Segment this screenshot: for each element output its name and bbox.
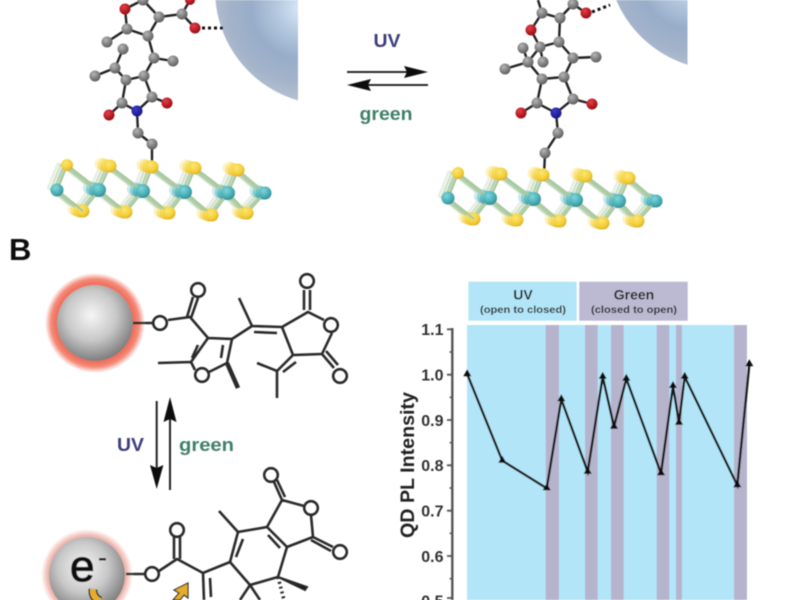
legend box Green (579, 282, 688, 321)
atoms right molecule (500, 0, 602, 158)
data line (467, 364, 749, 488)
UV label top: UV (374, 31, 400, 51)
y axis title: QD PL Intensity (398, 392, 419, 538)
hydrogen bond dots left (202, 26, 224, 30)
legend box UV: UV (513, 286, 533, 302)
y tick labels (421, 322, 444, 600)
quantum dot top with glow (45, 273, 145, 373)
green label top: green (360, 104, 412, 124)
nanoparticle sphere left (215, 0, 298, 101)
y tick labels: 0.9 (421, 413, 444, 430)
data markers (463, 359, 753, 490)
nanoparticle sphere right (616, 0, 688, 65)
bonds left molecule (95, 0, 195, 167)
legend box UV (468, 282, 577, 321)
green label side: green (179, 435, 234, 455)
quantum dot bottom with electron (41, 529, 133, 600)
chart: QD PL intensity (398, 322, 753, 600)
y tick labels: 0.6 (421, 549, 444, 566)
equilibrium arrows top (347, 66, 428, 91)
y tick labels: 0.7 (421, 504, 444, 520)
y tick labels: 1.1 (421, 322, 444, 339)
y tick labels: 0.8 (421, 458, 444, 475)
closed-form molecule structure (126, 468, 347, 600)
chart background bands (467, 325, 747, 600)
atoms left molecule (90, 0, 200, 150)
legend box Green: (closed to open) (591, 304, 677, 316)
UV label side: UV (117, 435, 144, 455)
open-form molecule structure (133, 274, 347, 398)
MoS2 slab left (48, 158, 272, 222)
legend box Green: Green (614, 286, 654, 302)
panel label B: B (9, 232, 31, 267)
legend box UV: (open to closed) (480, 304, 566, 316)
MoS2 slab right (439, 166, 662, 230)
vertical equilibrium arrows (150, 397, 176, 490)
small gold arrow (173, 583, 188, 600)
bonds right molecule (505, 0, 596, 175)
hydrogen bond dots right (592, 5, 610, 12)
quantum dot bottom with electron: e (70, 542, 94, 591)
y axis (447, 328, 452, 600)
y tick labels: 1.0 (421, 368, 444, 384)
